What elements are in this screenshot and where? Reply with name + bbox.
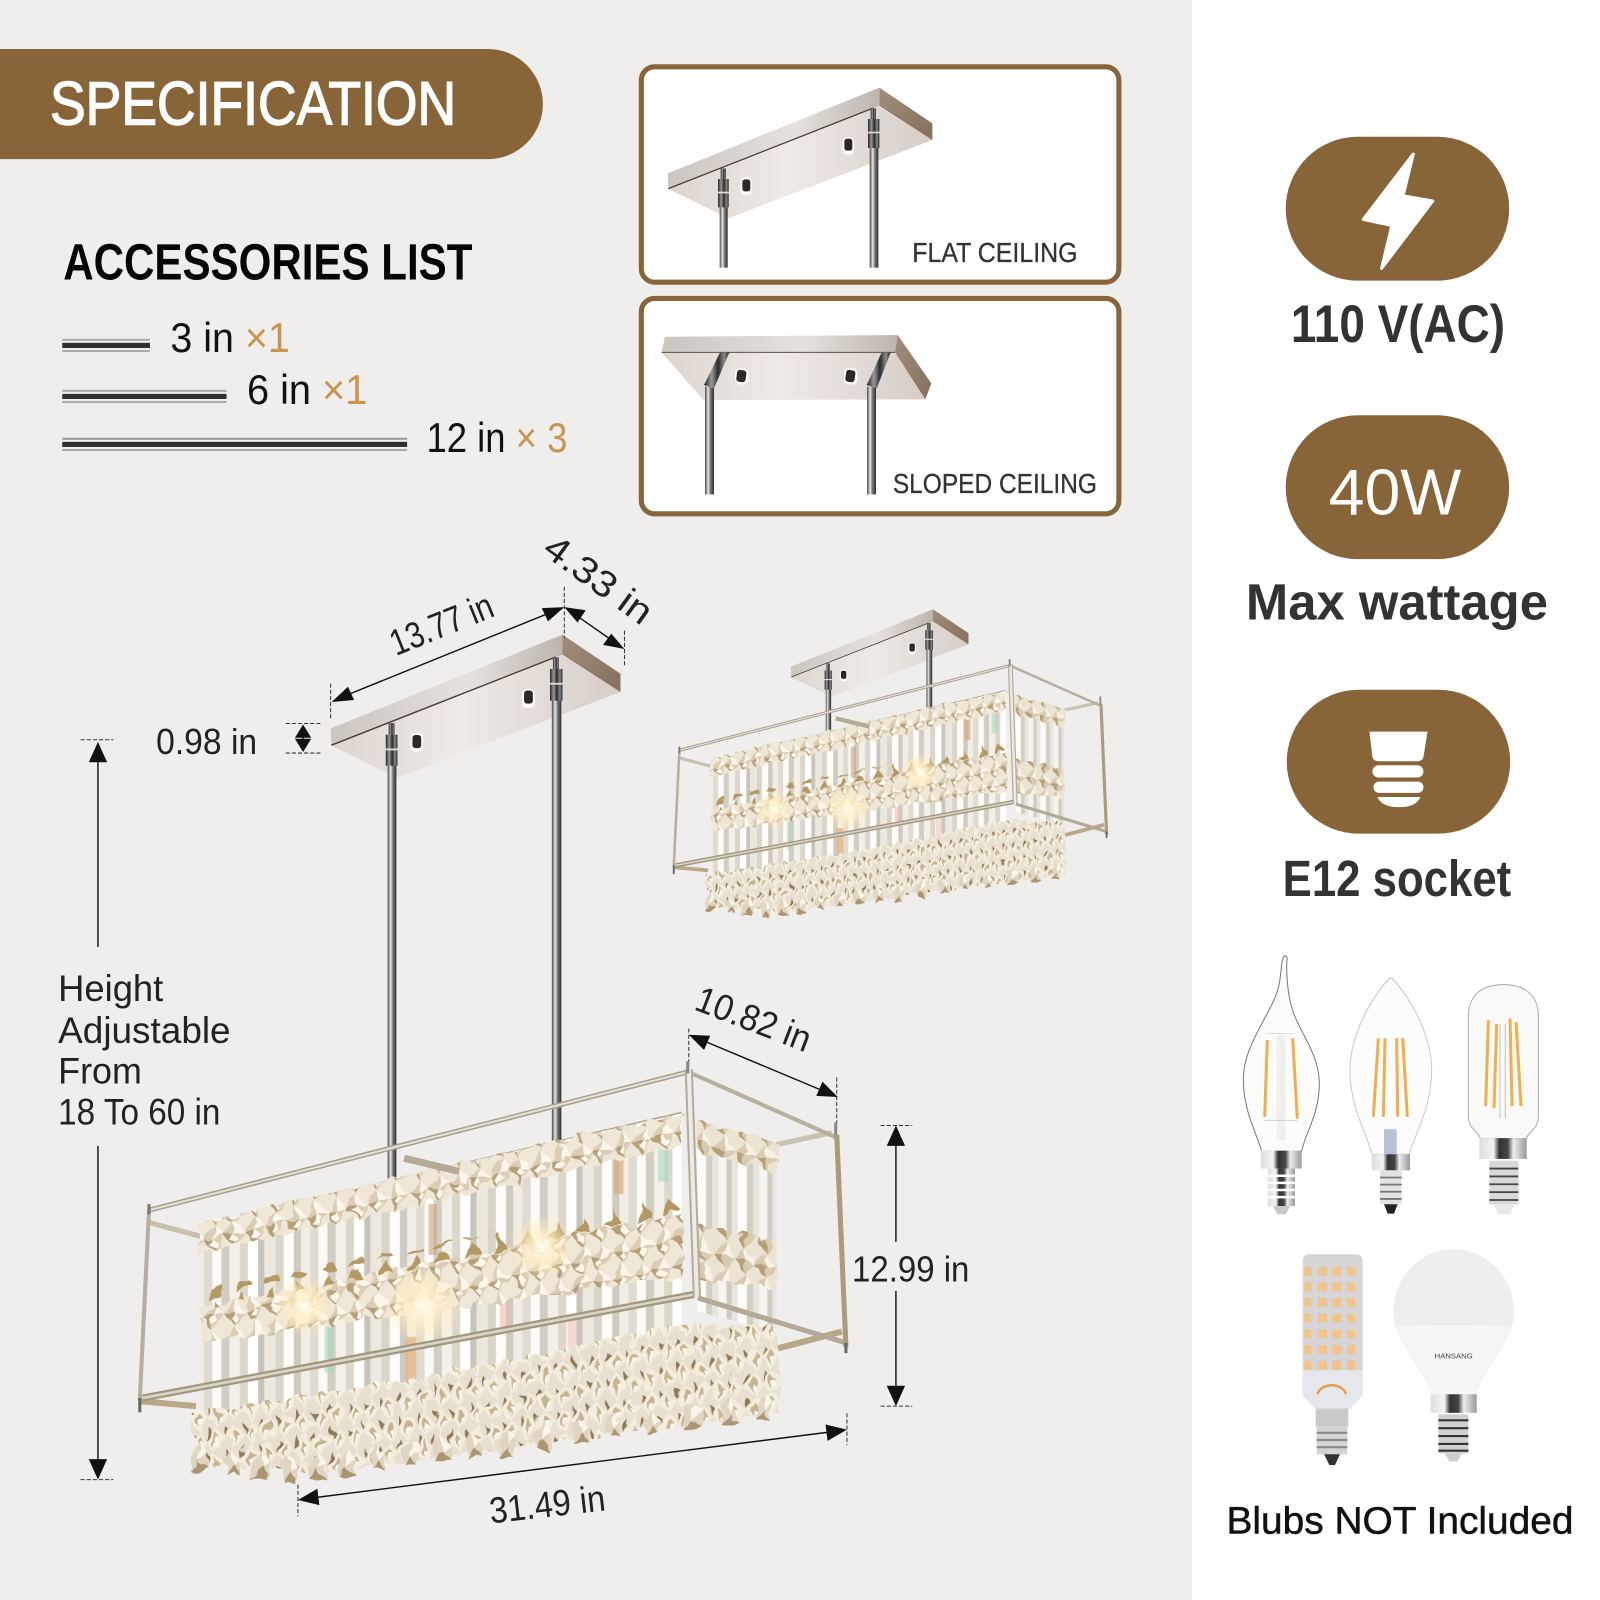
note: bulbs not included: Blubs NOT Included: [1227, 1500, 1573, 1542]
icon: flame tip bulb: [1243, 956, 1319, 1214]
bulb options: [1243, 956, 1538, 1465]
icon: e12 screw base: [1369, 732, 1428, 807]
label: 6 in x 1: 6 in ×1: [247, 366, 367, 413]
accessories list rows: [62, 314, 567, 461]
heading: specification banner: [0, 49, 543, 159]
icon: tubular bulb: [1468, 985, 1538, 1214]
dimension: 12.99 in: [852, 1126, 969, 1406]
image: flat ceiling plate with rods: [668, 88, 932, 268]
heading: specification banner: SPECIFICATION: [50, 69, 456, 137]
panel: white right column: [1192, 0, 1600, 1600]
label: voltage: 110 V(AC): [1291, 295, 1505, 354]
dimension: 13.77 in: 13.77 in: [384, 585, 499, 664]
label: flat ceiling: FLAT CEILING: [912, 237, 1078, 268]
icon: candle bulb: [1350, 978, 1432, 1214]
heading: accessories list: ACCESSORIES LIST: [63, 234, 472, 291]
accessory: 12 in rod: [62, 438, 407, 451]
icon: globe led bulb: HANSANG: [1435, 1353, 1473, 1361]
label: 3 in x 1: 3 in ×1: [170, 314, 290, 361]
spec: socket pill and label: [1283, 690, 1511, 907]
dimension: adjustable height: 18 To 60 in: [58, 1091, 220, 1132]
dimension: 4.33 in: 4.33 in: [536, 526, 661, 633]
dimension: 4.33 in: [536, 526, 661, 667]
panel: flat ceiling: [641, 67, 1119, 282]
dimension: adjustable height: Height: [58, 968, 163, 1009]
accessory: 3 in rod: [62, 339, 150, 352]
dimension: 10.82 in: [689, 978, 838, 1122]
panel: grey left background: [0, 0, 1192, 1600]
spec: wattage pill and label: [1246, 415, 1548, 630]
panel: sloped ceiling: [641, 298, 1119, 514]
label: e12 socket: E12 socket: [1283, 850, 1511, 907]
label: max wattage: Max wattage: [1246, 573, 1548, 630]
dimension: 0.98 in: [156, 722, 322, 762]
accessory: 6 in rod: [62, 390, 227, 403]
dimension: 12.99 in: 12.99 in: [852, 1250, 969, 1290]
image: sloped ceiling plate with rods: [662, 335, 931, 494]
value: 40W: 40W: [1329, 455, 1462, 528]
dimension: 31.49 in: 31.49 in: [487, 1478, 607, 1531]
dimension: 31.49 in: [298, 1413, 847, 1531]
dimension: adjustable height: Adjustable: [58, 1010, 231, 1051]
label: 12 in x 3: 12 in × 3: [427, 414, 567, 461]
dimension: adjustable height: From: [58, 1051, 142, 1092]
image: main chandelier with plate and rods: [139, 635, 846, 1482]
dimension: 0.98 in: 0.98 in: [156, 722, 257, 762]
icon: corn led bulb: [1303, 1254, 1363, 1465]
image: small chandelier with short rods: [673, 609, 1107, 917]
dimension: adjustable height: [58, 740, 231, 1480]
dimension: 10.82 in: 10.82 in: [690, 978, 817, 1060]
icon: lightning bolt: [1363, 154, 1433, 268]
label: sloped ceiling: SLOPED CEILING: [893, 468, 1097, 499]
dimension: 13.77 in: [331, 585, 564, 720]
spec: voltage pill and label: [1286, 137, 1509, 354]
icon: globe led bulb: [1393, 1249, 1514, 1461]
